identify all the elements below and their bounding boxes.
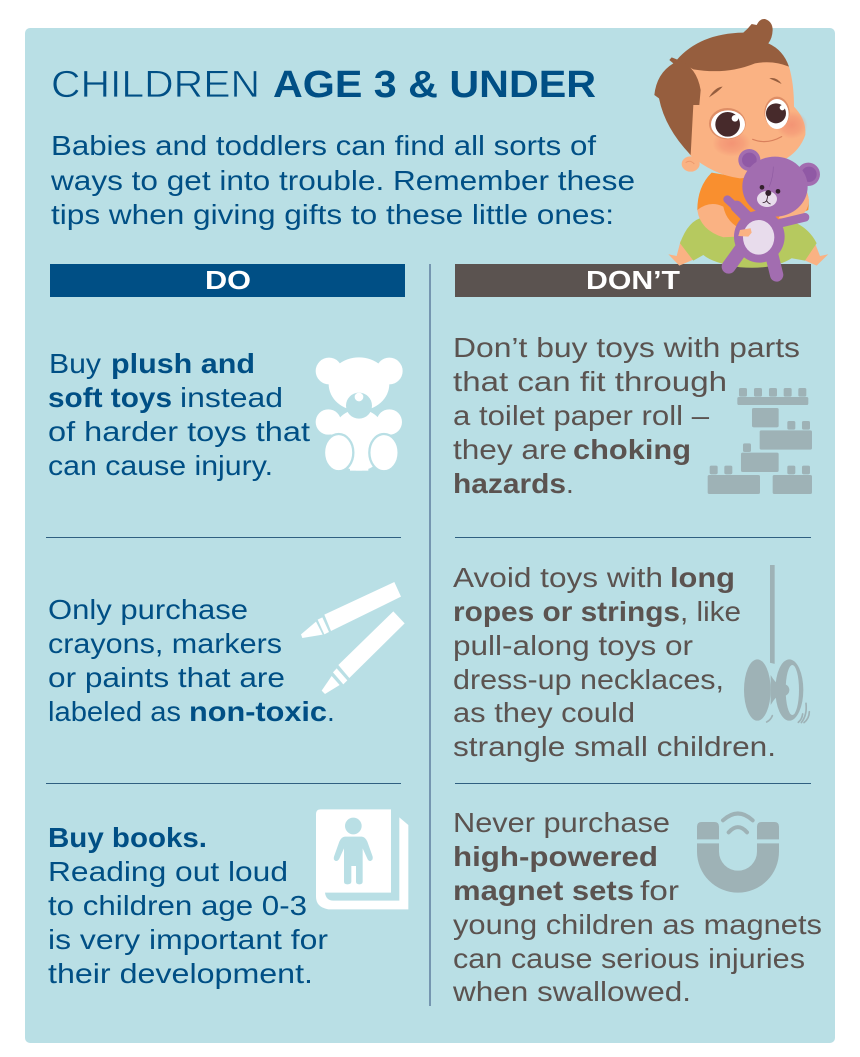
text: plush toys tip: soft toys bbox=[48, 382, 172, 413]
heading: DON'T bbox=[455, 264, 811, 297]
title bbox=[51, 64, 596, 106]
text: books tip: is very important for bbox=[48, 924, 328, 955]
icon: yo-yo on string bbox=[744, 565, 809, 723]
icon: magnet bbox=[697, 813, 779, 893]
text: crayons tip: crayons, markers bbox=[48, 628, 282, 659]
text: choking hazards tip: hazards bbox=[453, 468, 566, 499]
text: crayons tip: labeled as bbox=[48, 696, 181, 727]
text: choking hazards tip: a toilet paper roll – bbox=[453, 400, 709, 431]
text: choking hazards tip: that can fit through bbox=[453, 366, 727, 397]
text: magnets tip: young children as magnets bbox=[453, 909, 822, 940]
text: books tip bbox=[48, 822, 328, 989]
text: plush toys tip: can cause injury. bbox=[48, 450, 273, 481]
heading: DO: DO bbox=[205, 265, 251, 295]
text: plush toys tip bbox=[48, 348, 310, 481]
icon: crayons bbox=[301, 582, 405, 694]
text: strings tip: as they could bbox=[453, 697, 635, 728]
text: books tip: their development. bbox=[48, 958, 313, 989]
text: strings tip: ropes or strings bbox=[453, 596, 680, 627]
text: magnets tip: Never purchase bbox=[453, 807, 670, 838]
text: strings tip: Avoid toys with bbox=[453, 562, 663, 593]
ear bbox=[682, 156, 700, 172]
intro text: Babies and toddlers can find all sorts of bbox=[51, 130, 596, 161]
icon: building blocks bbox=[708, 388, 812, 494]
text: magnets tip: for bbox=[640, 875, 679, 906]
text: plush toys tip: of harder toys that bbox=[48, 416, 310, 447]
text: choking hazards tip bbox=[453, 332, 800, 499]
text: magnets tip: high-powered bbox=[453, 841, 658, 872]
text: plush toys tip: plush and bbox=[111, 348, 255, 379]
cheeks bbox=[712, 111, 808, 157]
text: magnets tip bbox=[452, 807, 822, 1007]
shirt bbox=[697, 173, 809, 237]
text: choking hazards tip: Don’t buy toys with parts bbox=[453, 332, 800, 363]
text: strings tip: strangle small children. bbox=[453, 731, 776, 762]
text: magnets tip: magnet sets bbox=[453, 875, 634, 906]
text: crayons tip: non-toxic bbox=[189, 696, 327, 727]
arms bbox=[697, 184, 809, 237]
text: crayons tip: Only purchase bbox=[48, 594, 248, 625]
text: choking hazards tip: choking bbox=[573, 434, 691, 465]
face bbox=[709, 78, 790, 142]
text: books tip: Reading out loud bbox=[48, 856, 288, 887]
text: choking hazards tip: they are bbox=[453, 434, 567, 465]
text: books tip: to children age 0-3 bbox=[48, 890, 307, 921]
feet and legs bbox=[668, 217, 828, 268]
hair bbox=[654, 19, 789, 155]
title: AGE 3 & UNDER bbox=[273, 64, 596, 106]
heading: DO bbox=[50, 264, 405, 297]
text: magnets tip: can cause serious injuries bbox=[453, 943, 805, 974]
text: crayons tip: or paints that are bbox=[48, 662, 285, 693]
text: strings tip bbox=[453, 562, 776, 762]
icon: book bbox=[316, 809, 408, 909]
intro text: tips when giving gifts to these little ones: bbox=[51, 199, 614, 230]
head bbox=[672, 53, 805, 178]
teddy bbox=[727, 149, 820, 275]
text: strings tip: long bbox=[670, 562, 735, 593]
hand bbox=[738, 228, 752, 237]
heading: DON'T: DON’T bbox=[586, 265, 680, 295]
icon: teddy bear bbox=[316, 357, 403, 471]
illustration: toddler holding purple teddy bbox=[654, 19, 828, 275]
title: CHILDREN bbox=[51, 64, 260, 106]
text: books tip: Buy books. bbox=[48, 822, 207, 853]
text: crayons tip bbox=[48, 594, 335, 727]
text: strings tip: dress-up necklaces, bbox=[453, 664, 724, 695]
text: strings tip: pull-along toys or bbox=[453, 630, 693, 661]
text: crayons tip: . bbox=[327, 696, 335, 727]
text: magnets tip: when swallowed. bbox=[452, 976, 691, 1007]
text: choking hazards tip: . bbox=[566, 468, 574, 499]
text: strings tip: , like bbox=[680, 596, 741, 627]
text: plush toys tip: Buy bbox=[49, 348, 101, 379]
text: plush toys tip: instead bbox=[180, 382, 283, 413]
intro text: ways to get into trouble. Remember these bbox=[50, 165, 635, 196]
intro text bbox=[50, 130, 635, 230]
